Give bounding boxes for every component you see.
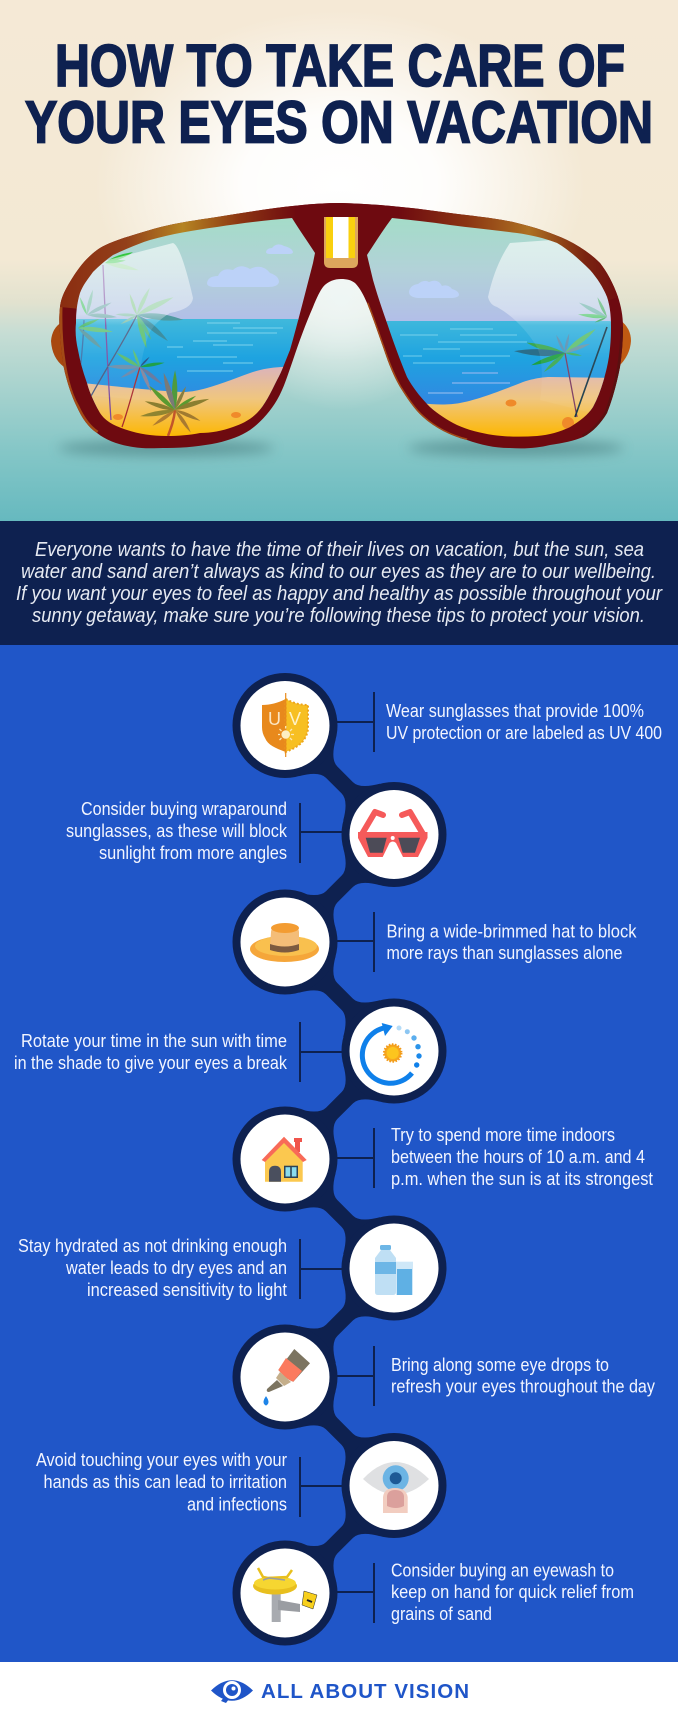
tips panel (0, 645, 678, 1662)
clouds (207, 244, 293, 287)
title (25, 33, 653, 156)
tip 1: UV protection (232, 673, 662, 778)
tip text: more rays than sunglasses alone (386, 942, 622, 963)
tip text: Consider buying an eyewash to (391, 1560, 614, 1580)
temple arms (51, 320, 631, 367)
tip text: p.m. when the sun is at its strongest (391, 1168, 653, 1189)
lens glare (488, 240, 611, 412)
left lens (68, 215, 320, 445)
tip 2: wraparound sunglasses (66, 782, 446, 887)
brand name: ALL ABOUT VISION (261, 1680, 469, 1703)
palm tree low (107, 348, 165, 392)
tip 7: eye drops (232, 1324, 656, 1430)
icon: water bottle and glass (375, 1245, 413, 1295)
tip text: in the shade to give your eyes a break (14, 1052, 288, 1073)
tip text: Bring a wide-brimmed hat to block (386, 920, 637, 942)
tip text: increased sensitivity to light (87, 1279, 287, 1300)
hero background (0, 0, 678, 521)
beach pebbles (506, 400, 574, 429)
footer (0, 1662, 678, 1714)
icon: UV shield (262, 693, 308, 757)
intro text (16, 539, 663, 627)
beach pebbles (113, 412, 241, 420)
illustration: sunglasses reflecting a beach (51, 203, 631, 456)
icon: eyewash station (253, 1568, 317, 1622)
icon: rotating arrow around sun (362, 1023, 422, 1083)
tip text: between the hours of 10 a.m. and 4 (391, 1146, 645, 1167)
palm tree left (80, 290, 116, 318)
tip text: water leads to dry eyes and an (65, 1257, 287, 1278)
intro band (0, 521, 678, 645)
tip text: hands as this can lead to irritation (44, 1471, 287, 1492)
tip text (391, 1124, 653, 1189)
tip 4: rotate sun and shade (14, 998, 446, 1104)
tip text: Rotate your time in the sun with time (21, 1030, 287, 1051)
timeline connectors (299, 739, 380, 1581)
tip text (14, 1030, 288, 1073)
tip text: keep on hand for quick relief from (391, 1581, 634, 1602)
glasses ground shadows (58, 440, 624, 456)
tip 5: stay indoors (232, 1106, 653, 1212)
palm tree large (514, 327, 598, 373)
tip text: grains of sand (391, 1603, 492, 1624)
tip 6: stay hydrated (18, 1216, 446, 1320)
tip text: Try to spend more time indoors (391, 1124, 615, 1145)
palm tree edge (578, 297, 608, 323)
cloud (409, 281, 459, 298)
palm tree on the beach (140, 370, 210, 434)
tip 8: avoid touching eyes (36, 1433, 446, 1538)
glasses frame (59, 203, 623, 448)
tip text (36, 1449, 287, 1514)
icon: eye drop bottle (264, 1349, 310, 1405)
tip 9: eyewash (232, 1540, 634, 1646)
tip text: Avoid touching your eyes with your (36, 1449, 287, 1470)
icon: hat (250, 923, 319, 962)
tip text (391, 1354, 656, 1396)
tip text (386, 700, 662, 743)
palm trunks (565, 327, 607, 417)
tip text (391, 1560, 634, 1624)
tip text: Bring along some eye drops to (391, 1354, 609, 1375)
icon: UV shield: U (268, 709, 281, 729)
palm tree centre (115, 287, 184, 349)
bridge insert (324, 217, 358, 268)
icon: All About Vision eye logo (211, 1680, 253, 1703)
tip 3: wide-brimmed hat (232, 890, 637, 994)
tip text (386, 920, 637, 963)
palm trunks (78, 265, 175, 436)
icon: red sunglasses (358, 812, 428, 857)
icon: eye and finger (363, 1462, 429, 1513)
tip text: Wear sunglasses that provide 100% (386, 700, 644, 721)
right lens (367, 218, 611, 437)
palm tree top (105, 252, 138, 270)
tip text: Consider buying wraparound (81, 798, 287, 819)
tip text: and infections (187, 1494, 287, 1514)
icon: house (262, 1137, 307, 1182)
lens glare (68, 243, 193, 400)
icon: UV shield: V (289, 709, 301, 729)
tip text: sunglasses, as these will block (66, 820, 288, 841)
tip text: sunlight from more angles (99, 842, 287, 863)
tip text (18, 1235, 287, 1300)
palm tree left low (78, 319, 113, 349)
tip text: Stay hydrated as not drinking enough (18, 1235, 287, 1256)
tip text (66, 798, 288, 863)
